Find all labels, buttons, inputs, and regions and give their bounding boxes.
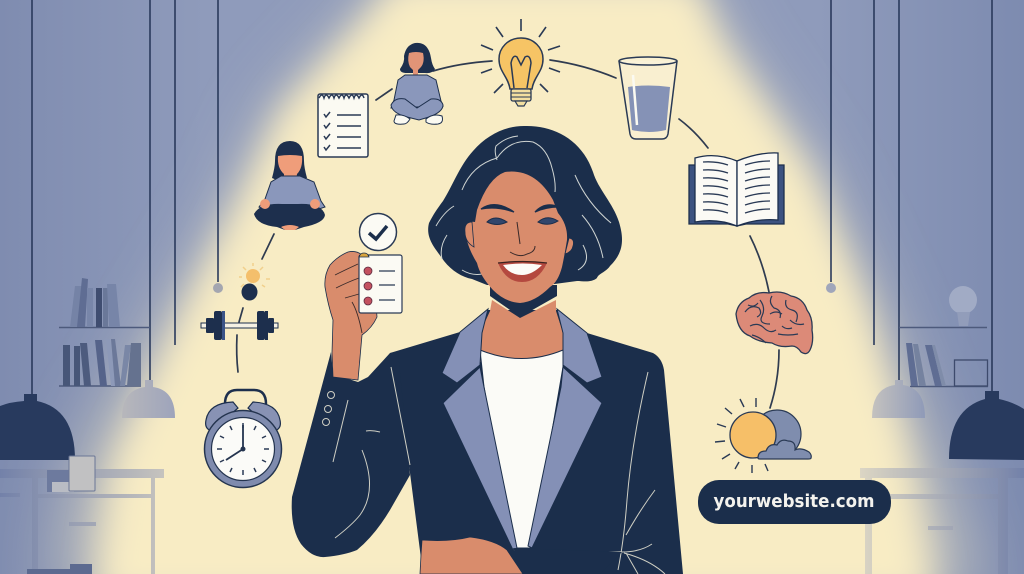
lapels <box>442 309 602 550</box>
nose <box>510 222 535 256</box>
right room scene <box>826 0 1024 574</box>
neck and chest skin <box>480 300 563 362</box>
ears <box>465 222 574 254</box>
icon: brain <box>736 292 813 354</box>
left desk folder <box>47 456 95 492</box>
icon: small bulb with pebble <box>239 263 270 300</box>
left big lamp <box>0 394 75 460</box>
left desk <box>0 469 164 574</box>
blazer sleeve <box>292 352 410 557</box>
right laptop <box>954 360 988 386</box>
raised hand <box>325 251 377 380</box>
icon: globe bulb on shelf <box>949 286 977 326</box>
white shirt <box>480 350 563 548</box>
icon: hanging bulb left <box>213 283 223 293</box>
face <box>466 172 567 303</box>
icon: open book <box>689 153 784 226</box>
left bottom books <box>27 564 92 574</box>
icon: meditating woman top <box>391 43 443 124</box>
eyes <box>487 218 558 224</box>
website pill <box>698 480 891 524</box>
neck shadow <box>490 285 557 317</box>
icon: alarm clock <box>204 390 282 488</box>
smile <box>498 262 547 282</box>
website pill: yourwebsite.com <box>714 491 874 512</box>
left shelves <box>59 328 150 386</box>
icon: seated meditating woman <box>254 141 325 230</box>
blazer body <box>390 310 683 574</box>
hair highlights <box>436 136 611 274</box>
connector lines <box>237 60 779 408</box>
sleeve and jacket highlights <box>322 367 665 574</box>
main figure: woman <box>292 126 683 574</box>
forearm cuff <box>513 548 622 574</box>
icon: dumbbell <box>201 311 278 340</box>
icon: water glass <box>619 57 677 139</box>
right shelves <box>899 328 988 386</box>
eyebrows <box>481 205 559 212</box>
right small lamp <box>872 380 925 418</box>
left small lamp <box>122 380 175 418</box>
icon: sun and cloud <box>715 398 811 473</box>
left books <box>63 278 141 386</box>
lower hand <box>420 537 523 574</box>
right desk <box>860 468 1024 574</box>
right big lamp <box>949 391 1024 460</box>
left room scene <box>0 0 223 574</box>
right books <box>906 343 946 386</box>
hair <box>428 126 622 285</box>
held checklist card <box>359 253 402 313</box>
icon: hanging bulb right <box>826 283 836 293</box>
icon: check badge <box>360 214 396 250</box>
icon: checklist notepad <box>318 94 368 157</box>
icon: light bulb <box>481 19 560 106</box>
